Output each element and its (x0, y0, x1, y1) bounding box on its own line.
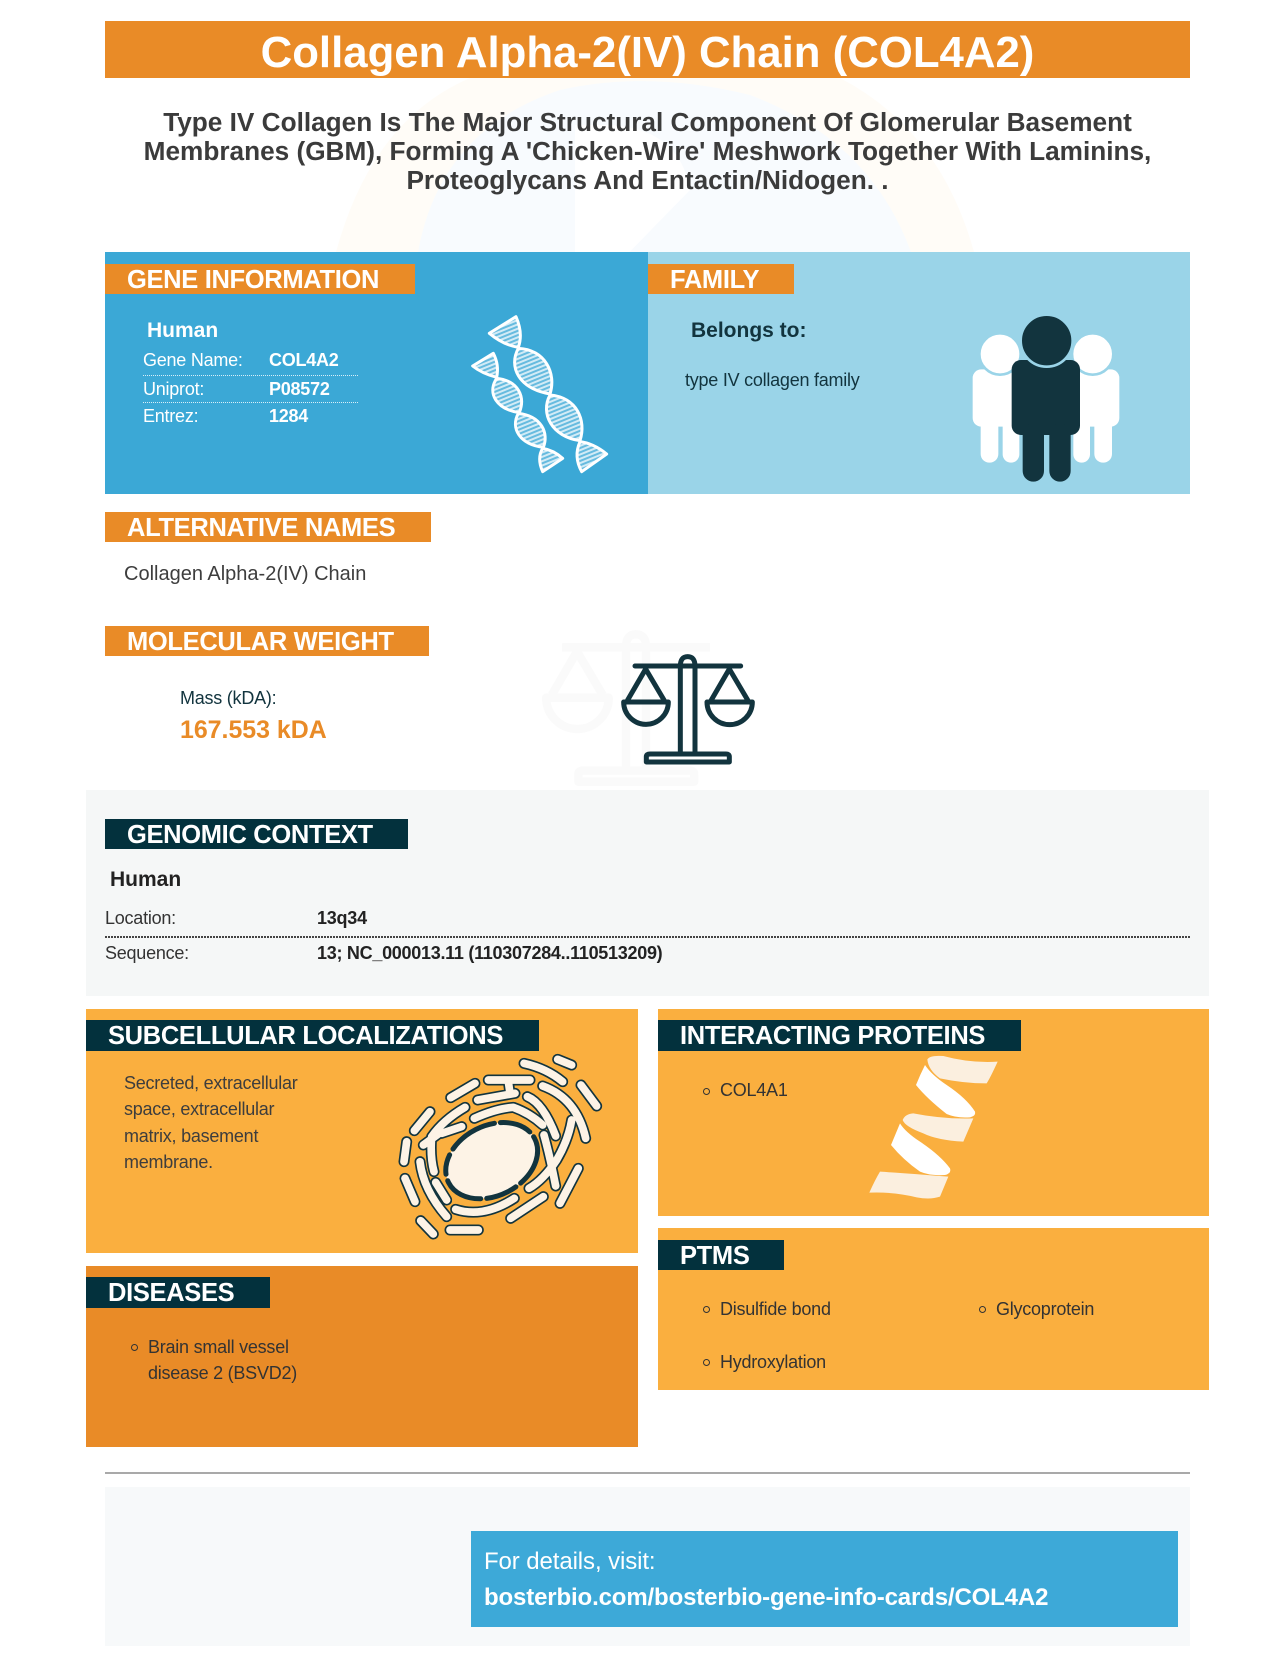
callout: details link (471, 1531, 1178, 1627)
subcellular text: Secreted, extracellular (124, 1073, 298, 1093)
disease item: Brain small vessel (148, 1337, 289, 1357)
panel: subcellular localizations (86, 1009, 638, 1253)
panel: footer (105, 1487, 1190, 1646)
heading: diseases (86, 1277, 270, 1308)
PTM item: glycoprotein: Glycoprotein (996, 1299, 1094, 1319)
heading: gene information: GENE INFORMATION (127, 266, 379, 294)
icon: ribbon helix (869, 1056, 998, 1198)
mass label: Mass (kDA): (180, 688, 276, 708)
heading: diseases: DISEASES (108, 1279, 234, 1307)
interacting protein item: COL4A1 (720, 1080, 788, 1100)
gene details table: 1284 (269, 406, 308, 426)
subcellular text (124, 1073, 298, 1172)
sequence row: 13; NC_000013.11 (110307284..110513209) (317, 943, 662, 963)
gene details table: Gene Name: (143, 350, 243, 370)
PTM item: disulfide bond: Disulfide bond (720, 1299, 831, 1319)
family label: Belongs to: (691, 319, 806, 342)
heading: alternative names: ALTERNATIVE NAMES (127, 514, 395, 542)
subtitle (144, 107, 1151, 195)
subcellular text: space, extracellular (124, 1099, 274, 1119)
family text: type IV collagen family (685, 370, 860, 390)
heading: PTMs: PTMS (680, 1242, 750, 1270)
genomic species label: Human (110, 868, 181, 891)
icon: balance scale (621, 654, 755, 764)
gene details table: P08572 (269, 379, 330, 399)
panel: gene information (105, 252, 648, 494)
sequence row (105, 943, 662, 963)
subcellular text: matrix, basement (124, 1126, 258, 1146)
heading: family: FAMILY (670, 266, 759, 294)
title (105, 21, 1190, 78)
disease item: disease 2 (BSVD2) (148, 1363, 297, 1383)
subtitle: Proteoglycans And Entactin/Nidogen. . (406, 165, 889, 195)
panel: diseases (86, 1266, 638, 1447)
title: Collagen Alpha-2(IV) Chain (COL4A2) (261, 28, 1034, 77)
subtitle: Type IV Collagen Is The Major Structural Component Of Glomerular Basement (163, 107, 1132, 137)
heading: molecular weight: MOLECULAR WEIGHT (127, 628, 394, 656)
callout: details link: For details, visit: (484, 1548, 655, 1575)
gene details table: Entrez: (143, 406, 198, 426)
location row (105, 908, 368, 928)
callout: details link: bosterbio.com/bosterbio-gene-info-cards/COL4A2 (484, 1584, 1048, 1611)
gene details table: Uniprot: (143, 379, 204, 399)
heading: PTMs (658, 1240, 784, 1270)
PTM item: hydroxylation: Hydroxylation (720, 1352, 826, 1372)
icon: organelle cell (398, 1054, 602, 1240)
heading: interacting proteins: INTERACTING PROTEINS (680, 1022, 985, 1050)
heading: genomic context: GENOMIC CONTEXT (127, 821, 373, 849)
gene species label: Human (147, 319, 218, 342)
location row: Location: (105, 908, 176, 928)
heading: subcellular localizations: SUBCELLULAR LOCALIZATIONS (108, 1022, 503, 1050)
sequence row: Sequence: (105, 943, 189, 963)
mass value: 167.553 kDA (180, 716, 327, 744)
panel: interacting proteins (658, 1009, 1209, 1216)
heading: family (648, 264, 794, 294)
subtitle: Membranes (GBM), Forming A 'Chicken-Wire' Meshwork Together With Laminins, (144, 136, 1151, 166)
panel: genomic context (86, 790, 1209, 996)
icon: people (972, 316, 1120, 482)
location row: 13q34 (317, 908, 367, 928)
alternative names text: Collagen Alpha-2(IV) Chain (124, 563, 366, 585)
gene details table: COL4A2 (269, 350, 339, 370)
subcellular text: membrane. (124, 1152, 213, 1172)
icon: DNA helix (471, 315, 608, 474)
watermark logo (300, 78, 1000, 252)
panel: PTMs (658, 1228, 1209, 1390)
gene details table (143, 350, 358, 426)
panel: family (648, 252, 1190, 494)
disease item (131, 1337, 297, 1383)
